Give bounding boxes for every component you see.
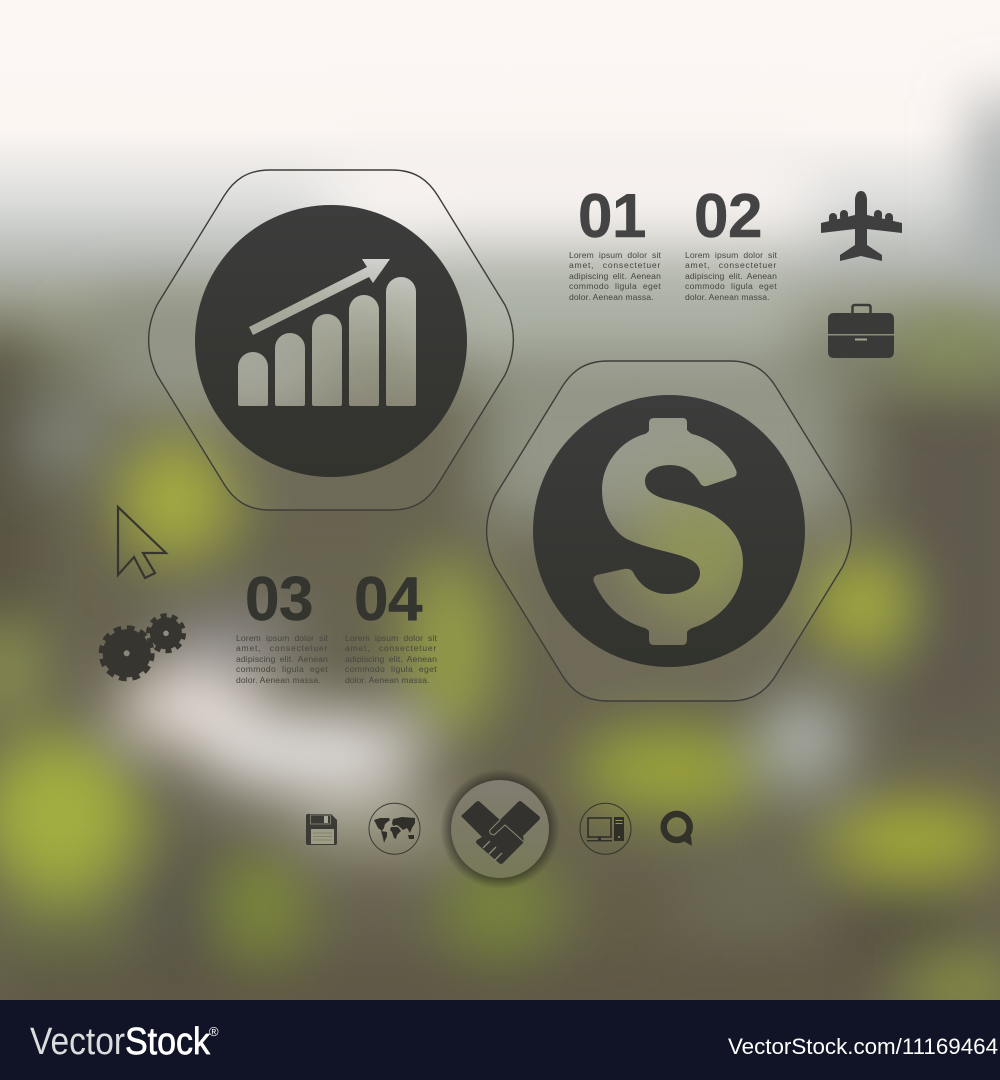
text block 01: commodo ligula eget: [569, 281, 661, 291]
large gear: [102, 628, 152, 678]
text block 03: dolor. Aenean massa.: [236, 675, 321, 685]
text block 03: commodo ligula eget: [236, 664, 328, 674]
text block 01: amet, consectetuer: [569, 260, 661, 270]
icon: dollar in circle: [533, 395, 805, 667]
text block 01: [569, 250, 661, 302]
number 04: 04: [354, 565, 422, 634]
number 01: 01: [578, 182, 646, 251]
text block 02: amet, consectetuer: [685, 260, 777, 270]
icon: briefcase: [828, 305, 894, 358]
text block 03: Lorem ipsum dolor sit: [236, 633, 328, 643]
text block 02: dolor. Aenean massa.: [685, 292, 770, 302]
text block 04: amet, consectetuer: [345, 643, 437, 653]
footer image id: VectorStock.com/11169464: [728, 1034, 998, 1059]
icon: computer in circle: [580, 803, 631, 854]
icon: growth bar chart in circle: [195, 205, 467, 477]
text block 04: dolor. Aenean massa.: [345, 675, 430, 685]
text block 02: Lorem ipsum dolor sit: [685, 250, 777, 260]
footer logo: [30, 1021, 219, 1063]
text block 03: adipiscing elit. Aenean: [236, 654, 328, 664]
icon: airplane: [821, 191, 902, 261]
small gear: [148, 616, 184, 651]
icon: cursor arrow: [118, 507, 166, 578]
text block 04: adipiscing elit. Aenean: [345, 654, 437, 664]
text block 01: Lorem ipsum dolor sit: [569, 250, 661, 260]
icon: search speech bubble: [664, 814, 692, 846]
text block 02: adipiscing elit. Aenean: [685, 271, 777, 281]
hexagon outline: dollar: [487, 361, 851, 701]
text block 03: amet, consectetuer: [236, 643, 328, 653]
text block 04: Lorem ipsum dolor sit: [345, 633, 437, 643]
text block 02: commodo ligula eget: [685, 281, 777, 291]
text block 01: dolor. Aenean massa.: [569, 292, 654, 302]
text block 04: commodo ligula eget: [345, 664, 437, 674]
icon: globe world map: [369, 803, 420, 854]
icon: floppy disk: [306, 814, 337, 845]
footer logo: Stock: [125, 1021, 211, 1063]
text block 04: [345, 633, 437, 685]
icon: gears: [102, 616, 184, 678]
text block 03: [236, 633, 328, 685]
number 02: 02: [694, 182, 762, 251]
text block 01: adipiscing elit. Aenean: [569, 271, 661, 281]
footer logo: ®: [209, 1024, 219, 1039]
icon: handshake in circle: [440, 769, 560, 889]
number 03: 03: [245, 565, 313, 634]
hexagon outline: growth chart: [149, 170, 513, 510]
footer bar: [0, 1000, 1000, 1080]
text block 02: [685, 250, 777, 302]
footer logo: Vector: [30, 1021, 125, 1063]
